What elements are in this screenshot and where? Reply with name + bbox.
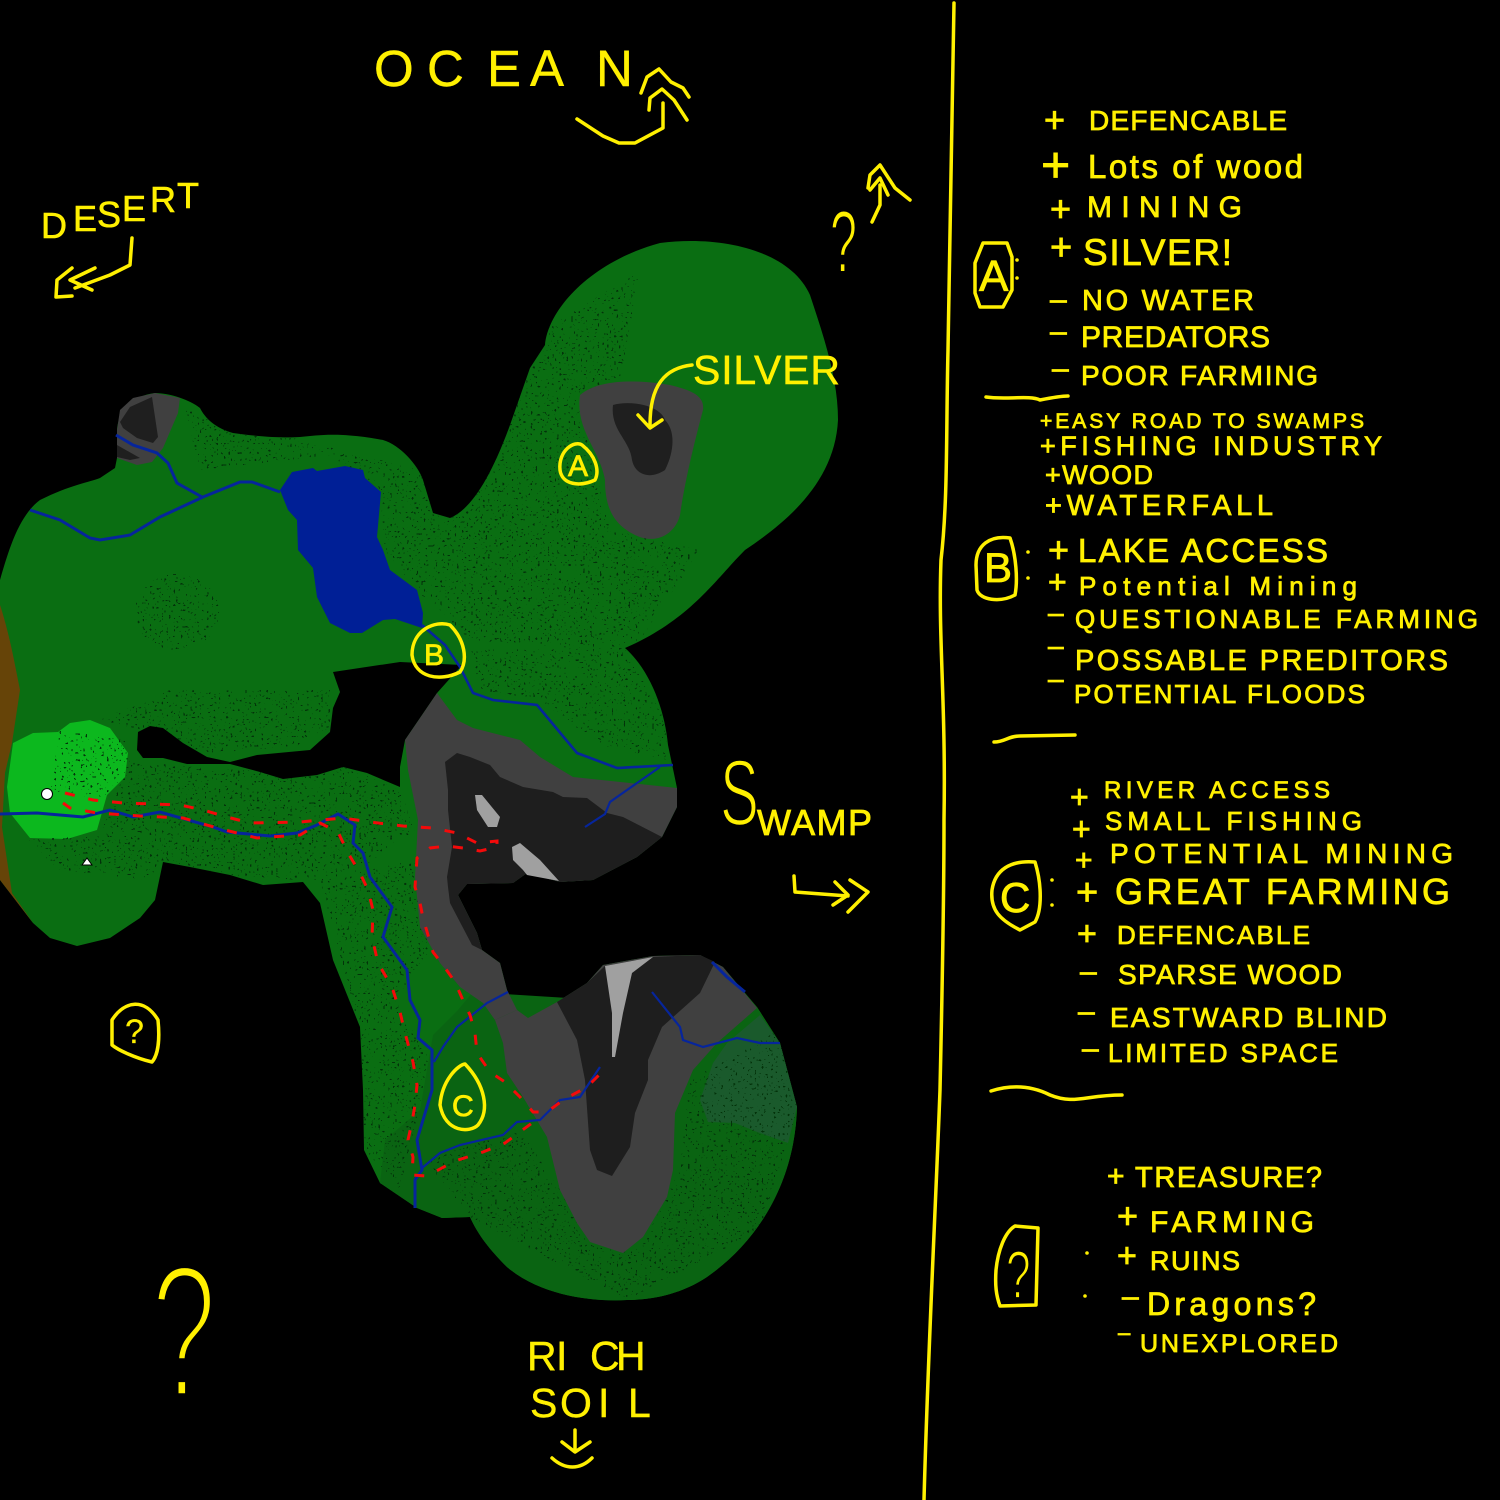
notes: site C: RIVER ACCESS: [1104, 777, 1330, 804]
notes: site A: +: [1050, 227, 1072, 269]
notes: unknown site: –: [1118, 1320, 1131, 1345]
notes: site B: –: [1048, 630, 1064, 661]
divider line: [924, 3, 954, 1500]
rivers: [0, 435, 780, 1208]
notes: site B: [976, 410, 1478, 709]
marker: site B: B: [424, 639, 444, 672]
notes: site C: +: [1070, 779, 1089, 815]
label: rich soil: [527, 1333, 651, 1467]
notes: site A: +: [1041, 137, 1070, 193]
label: swamp: [720, 740, 872, 912]
bright green meadow: [7, 720, 128, 839]
marker: unknown site west: ?: [125, 1013, 144, 1051]
notes: site C: –: [1080, 955, 1097, 988]
notes: site A: –: [1050, 315, 1067, 348]
label: swamp: S: [720, 740, 759, 845]
site A badge: [975, 243, 1019, 307]
notes: site C: EASTWARD BLIND: [1110, 1002, 1387, 1033]
notes: site B: +: [1048, 564, 1067, 600]
notes: site C: DEFENCABLE: [1117, 920, 1310, 950]
site A badge: A: [979, 252, 1009, 301]
label: ocean: OCEAN: [374, 40, 633, 97]
notes: site A: NO WATER: [1082, 285, 1254, 317]
notes: site B: –: [1048, 663, 1064, 694]
label: silver: [638, 347, 840, 428]
notes: site C: +: [1077, 915, 1097, 953]
notes: site A: SILVER!: [1083, 232, 1232, 273]
label: ocean: [374, 40, 689, 143]
central mountain range: [405, 693, 677, 1020]
label: rich soil: SOIL: [530, 1380, 651, 1426]
land stippling: [29, 276, 796, 1297]
notes: site A: +: [1044, 99, 1065, 140]
notes: site B: Potential Mining: [1079, 571, 1357, 601]
site B badge: [976, 537, 1030, 600]
notes: site A: [975, 99, 1318, 391]
swamp patch: [700, 1015, 797, 1143]
label: unknown north-east: ?: [830, 194, 857, 292]
notes: unknown site: +: [1107, 1160, 1125, 1193]
notes: unknown site: Dragons?: [1147, 1286, 1316, 1322]
mountain A: [579, 381, 703, 539]
map of the region: [0, 240, 850, 1310]
label: swamp: WAMP: [757, 802, 872, 843]
site C badge: C: [1000, 874, 1030, 921]
notes: site C: –: [1082, 1032, 1099, 1065]
marker: site A: A: [568, 450, 588, 483]
site B badge: B: [984, 544, 1012, 591]
site C badge: [992, 862, 1054, 930]
brown cliff on the west edge: [0, 605, 33, 923]
notes: site A: POOR FARMING: [1081, 360, 1318, 391]
label: desert: [41, 175, 199, 297]
label: desert: DESERT: [41, 175, 199, 246]
red dashed roads: [63, 793, 603, 1176]
notes: site C: [992, 777, 1453, 1068]
notes: site A: –: [1050, 283, 1067, 316]
lake: [280, 466, 423, 633]
notes: site C: –: [1078, 995, 1095, 1028]
notes: site C: +: [1075, 844, 1093, 877]
notes: unknown site: [996, 1160, 1338, 1358]
notes: unknown site: +: [1117, 1195, 1138, 1236]
darker southern lowland: [380, 992, 797, 1300]
notes: unknown site: UNEXPLORED: [1140, 1330, 1338, 1358]
notes: site A: +: [1050, 188, 1071, 229]
southern mountain range: [495, 955, 757, 1253]
notes: site B: +FISHING INDUSTRY: [1040, 431, 1382, 461]
notes: site A: PREDATORS: [1081, 321, 1270, 354]
notes: unknown site: –: [1122, 1280, 1139, 1313]
notes: site C: POTENTIAL MINING: [1110, 838, 1453, 869]
north-west peak: [117, 393, 180, 465]
notes: unknown site: RUINS: [1150, 1246, 1240, 1276]
notes: site C: SMALL FISHING: [1105, 806, 1362, 836]
notes: site B: +WATERFALL: [1045, 490, 1273, 522]
unknown site badge: [996, 1226, 1089, 1313]
marker: site A: [560, 444, 597, 484]
notes: site B: POTENTIAL FLOODS: [1074, 679, 1365, 709]
notes: unknown site: +: [1117, 1237, 1137, 1275]
notes: unknown site: FARMING: [1150, 1206, 1314, 1239]
marker: site C: [440, 1064, 484, 1130]
notes: site C: GREAT FARMING: [1115, 871, 1450, 912]
land mass: [0, 241, 838, 1300]
notes: site A: DEFENCABLE: [1089, 105, 1287, 136]
notes: unknown site: TREASURE?: [1135, 1162, 1322, 1194]
notes: site B: +EASY ROAD TO SWAMPS: [1040, 410, 1364, 433]
label: rich soil: RICH: [527, 1333, 646, 1379]
label: unknown north-east: [830, 165, 910, 292]
notes: site A: –: [1052, 352, 1069, 385]
notes: site B: LAKE ACCESS: [1078, 532, 1328, 569]
notes: site C: +: [1072, 811, 1091, 847]
notes: site B: POSSABLE PREDITORS: [1075, 645, 1448, 677]
marker: unknown site west: [112, 1004, 159, 1062]
village marker: [82, 858, 92, 865]
notes: site A: MINING: [1087, 191, 1242, 224]
label: unknown south-west: ?: [151, 1226, 217, 1438]
notes: site B: –: [1048, 597, 1064, 628]
notes: site C: +: [1076, 872, 1098, 914]
unknown site badge: ?: [1006, 1238, 1031, 1313]
marker: site B: [412, 624, 464, 677]
marker: site C: C: [452, 1090, 474, 1123]
notes: site B: +WOOD: [1045, 460, 1153, 490]
notes: site B: +: [1048, 529, 1069, 570]
notes: site C: LIMITED SPACE: [1108, 1038, 1338, 1068]
notes: site A: Lots of wood: [1088, 148, 1303, 185]
town marker: [42, 788, 52, 800]
label: silver: SILVER: [693, 347, 840, 393]
notes: site B: QUESTIONABLE FARMING: [1075, 604, 1478, 634]
notes: site C: SPARSE WOOD: [1118, 959, 1342, 990]
section dividers: [986, 396, 1122, 1099]
